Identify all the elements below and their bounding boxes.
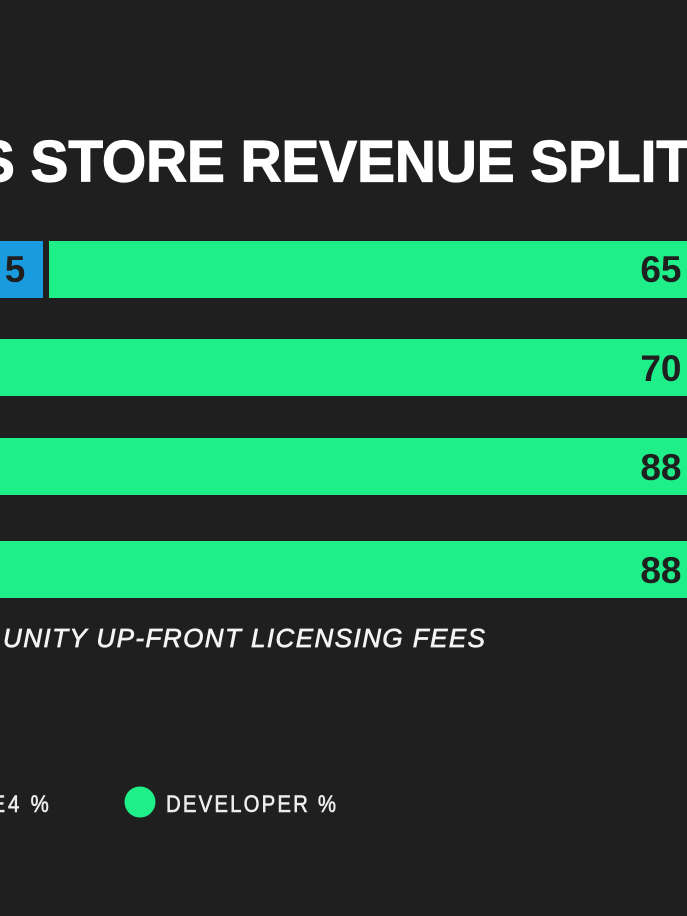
bar row 3: 88 [0,438,687,495]
bar row 4: 88: 88 [640,550,682,591]
bar row 3: 88: 88 [640,447,682,488]
bar row 2: 70: 70 [640,348,682,389]
bar row 2: 70 [0,339,687,396]
bar row 1: 35 / 65: 5 [5,249,25,290]
footnote: UNITY UP-FRONT LICENSING FEES [3,623,486,653]
bar row 1: 35 / 65: 65 [640,249,682,290]
bar row 1: 35 / 65 [0,241,687,298]
bar row 4: 88 [0,541,687,598]
legend: developer percent [124,786,336,818]
legend: developer percent: DEVELOPER % [166,790,336,817]
